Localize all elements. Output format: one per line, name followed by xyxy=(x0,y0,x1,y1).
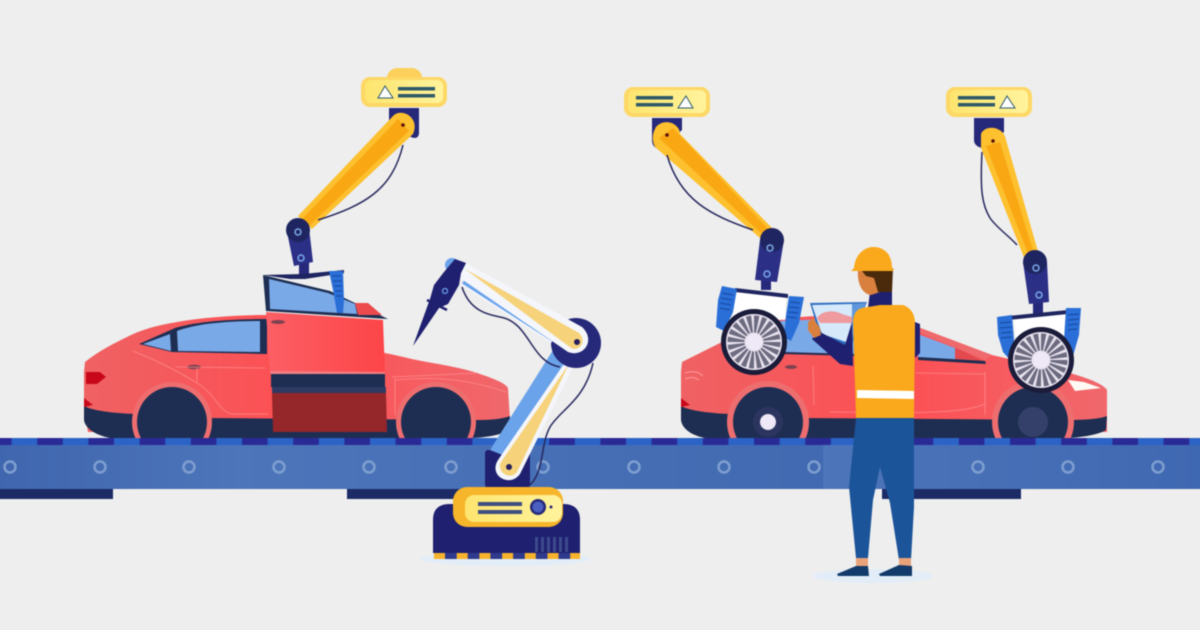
worker shadow xyxy=(813,569,933,583)
cable 2 xyxy=(667,155,753,230)
car 1 panel lines xyxy=(133,351,506,415)
worker hard hat xyxy=(851,247,894,271)
bracket 1 xyxy=(389,108,419,138)
robot base xyxy=(433,504,580,559)
worker shoes xyxy=(837,565,912,576)
worker neck and collar xyxy=(868,290,892,308)
lower arm xyxy=(490,350,574,480)
cable 3 xyxy=(981,152,1017,245)
wheel 1 xyxy=(721,309,787,375)
upper arm xyxy=(456,262,588,353)
car 2 door handle and panel lines xyxy=(785,365,985,415)
bracket 2 xyxy=(652,118,682,149)
forearm 3 xyxy=(1023,250,1049,314)
worker vest xyxy=(853,305,915,418)
forearm 1 xyxy=(286,218,313,276)
car 2 front wheel xyxy=(991,384,1075,439)
worker legs xyxy=(849,418,914,560)
car 1: red car with open door xyxy=(83,274,511,439)
elbow joint xyxy=(551,318,601,368)
robot arm 2: wheel holder xyxy=(624,87,804,375)
tablet xyxy=(810,302,867,347)
worker ankles xyxy=(856,558,911,568)
control panel 3 xyxy=(946,87,1032,117)
car 2 underbody xyxy=(681,406,1107,438)
cables xyxy=(462,287,593,485)
wheel gripper 2 xyxy=(716,286,804,341)
robot arm 3: wheel holder xyxy=(946,87,1081,393)
robot arm 1: door holder xyxy=(263,68,447,313)
upper arm 3 xyxy=(981,128,1039,260)
conveyor rollers xyxy=(4,462,1164,472)
control panel 2 xyxy=(624,87,710,117)
worker hair xyxy=(862,268,893,292)
pedestal xyxy=(485,450,530,488)
worker head xyxy=(858,268,892,295)
car 2: red car with wheels being fitted xyxy=(680,316,1108,439)
upper arm 2 xyxy=(653,122,774,238)
conveyor belt xyxy=(0,438,1200,499)
control panel 1 xyxy=(361,68,447,107)
car 1 rear wheel xyxy=(131,382,213,439)
forearm 2 xyxy=(755,228,784,290)
car 2 body xyxy=(681,316,1107,432)
car 1 body xyxy=(84,315,510,432)
door gripper xyxy=(263,270,344,313)
car 1 front wheel xyxy=(395,382,477,439)
car 1 side windows xyxy=(139,319,267,354)
car 1 open door xyxy=(263,275,388,432)
robot control hood xyxy=(453,487,563,527)
car 2 tail light xyxy=(681,398,690,407)
bracket 3 xyxy=(974,118,1004,148)
cable 1 xyxy=(318,145,403,220)
worker arms xyxy=(812,322,920,366)
worker hand xyxy=(808,318,821,338)
car 1 door handle xyxy=(187,365,201,369)
welding tool xyxy=(413,258,466,346)
wheel 2 xyxy=(1008,327,1074,393)
floor shadow xyxy=(420,552,590,566)
upper arm 1 xyxy=(298,113,415,229)
car 1 tail light xyxy=(86,372,106,384)
worker with tablet xyxy=(808,247,933,583)
wheel gripper 3 xyxy=(997,308,1081,361)
car 2 windows xyxy=(780,318,992,364)
car 1 sill and underbody xyxy=(84,406,510,438)
floor robot with welding tool xyxy=(413,258,601,566)
car 2 rear wheel xyxy=(726,381,810,439)
car 2 headlight xyxy=(1068,380,1101,391)
